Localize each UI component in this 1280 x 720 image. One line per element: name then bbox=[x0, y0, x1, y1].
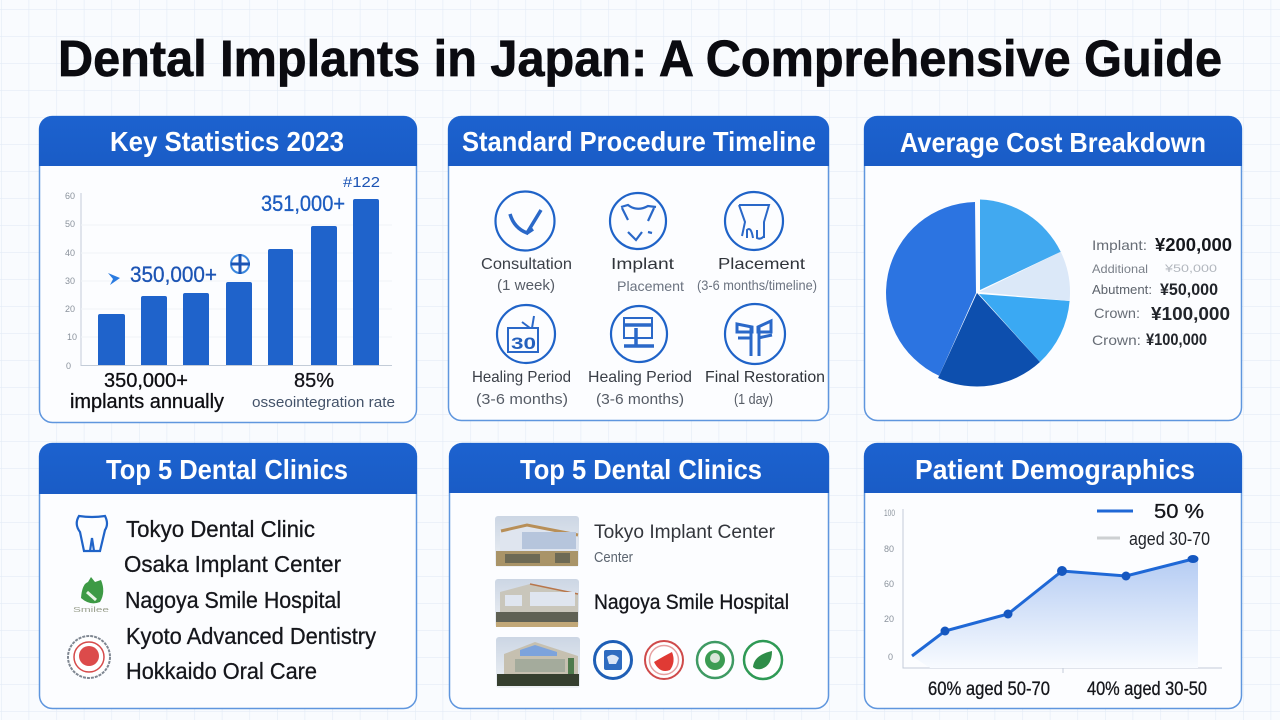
step: healing period: Healing Period bbox=[472, 369, 571, 386]
panel: patient demographics bbox=[864, 443, 1242, 708]
step: healing period two: (3-6 months) bbox=[596, 391, 684, 408]
panel: cost breakdown bbox=[864, 116, 1242, 420]
icon: tooth logo bbox=[77, 516, 107, 551]
step: consultation: Consultation bbox=[481, 256, 572, 273]
clinic names: Tokyo Dental Clinic bbox=[126, 516, 315, 542]
step: healing period two: Healing Period bbox=[588, 369, 692, 386]
legend: ¥50,000 bbox=[1164, 263, 1217, 275]
callout: upper stat on chart: #122 bbox=[343, 174, 380, 191]
caption: ages 50 to 70: 60% aged 50-70 bbox=[928, 679, 1050, 700]
icon: consultation check bbox=[496, 192, 554, 250]
photo: clinic building one bbox=[495, 516, 579, 567]
legend: ¥100,000 bbox=[1146, 330, 1207, 349]
heading: top clinics photos bbox=[449, 443, 829, 493]
clinic names: Nagoya Smile Hospital bbox=[125, 587, 341, 613]
stat: implants annually bbox=[70, 370, 224, 413]
callout: lower stat on chart: 350,000+ bbox=[130, 262, 217, 287]
line chart: 60 bbox=[884, 579, 894, 589]
icon: monitor bbox=[611, 306, 667, 362]
badge: green two bbox=[744, 641, 782, 679]
icon: red seal logo bbox=[68, 636, 110, 678]
chart legend bbox=[1097, 501, 1210, 549]
icon: calendar: 30 bbox=[511, 334, 536, 353]
legend: Implant: bbox=[1092, 237, 1147, 253]
heading: key statistics: Key Statistics 2023 bbox=[110, 126, 344, 157]
bar chart: 30 bbox=[65, 276, 75, 286]
clinic names: Hokkaido Oral Care bbox=[126, 658, 317, 684]
panel: key statistics bbox=[39, 116, 417, 422]
pie chart bbox=[886, 200, 1070, 386]
callout: lower stat on chart bbox=[108, 254, 250, 287]
legend: Crown: bbox=[1092, 332, 1141, 348]
photo: clinic building two bbox=[495, 579, 579, 627]
chart legend: aged 30-70 bbox=[1129, 529, 1210, 549]
heading: procedure timeline bbox=[448, 116, 829, 166]
line chart: 80 bbox=[884, 544, 894, 554]
caption: ages 30 to 50: 40% aged 30-50 bbox=[1087, 679, 1207, 700]
line chart: 100 bbox=[884, 508, 895, 518]
legend: Abutment: bbox=[1092, 282, 1152, 297]
heading: top clinics list: Top 5 Dental Clinics bbox=[106, 454, 348, 485]
stat: success rate: osseointegration rate bbox=[252, 394, 395, 411]
line chart: 0 bbox=[888, 652, 893, 662]
chart legend: 50 % bbox=[1154, 501, 1204, 523]
heading: patient demographics bbox=[864, 443, 1242, 493]
step: final restoration: (1 day) bbox=[734, 391, 773, 408]
badge: green one bbox=[697, 642, 733, 678]
legend: ¥50,000 bbox=[1160, 280, 1218, 299]
bar chart: 60 bbox=[65, 191, 75, 201]
step: final restoration bbox=[705, 304, 825, 408]
stat: success rate bbox=[252, 370, 395, 411]
bar chart: 50 bbox=[65, 219, 75, 229]
icon: leaf logo bbox=[73, 577, 109, 614]
clinic names: Kyoto Advanced Dentistry bbox=[126, 623, 376, 649]
step: placement bbox=[697, 192, 817, 293]
step: consultation: (1 week) bbox=[497, 277, 555, 294]
heading: cost breakdown bbox=[864, 116, 1242, 166]
line chart bbox=[884, 508, 1222, 673]
callout: upper stat on chart bbox=[261, 174, 380, 216]
legend: ¥200,000 bbox=[1155, 235, 1232, 255]
icon: tooth bbox=[725, 192, 783, 250]
clinic names: Osaka Implant Center bbox=[124, 551, 341, 577]
heading: procedure timeline: Standard Procedure Timeline bbox=[462, 126, 816, 157]
heading: top clinics list bbox=[39, 443, 417, 494]
step: implant placement bbox=[610, 193, 684, 294]
step: healing period: (3-6 months) bbox=[476, 391, 568, 408]
heading: top clinics photos: Top 5 Dental Clinics bbox=[520, 454, 762, 485]
step: implant placement: Placement bbox=[617, 278, 684, 294]
photo: clinic building three bbox=[496, 637, 580, 688]
panel: procedure timeline bbox=[448, 116, 829, 420]
icon: implant bbox=[610, 193, 666, 249]
stat: implants annually: implants annually bbox=[70, 391, 224, 413]
title: Dental Implants in Japan: A Comprehensive Guide bbox=[58, 30, 1222, 87]
stat: implants annually: 350,000+ bbox=[104, 370, 188, 392]
stat: success rate: 85% bbox=[294, 370, 334, 392]
step: final restoration: Final Restoration bbox=[705, 369, 825, 386]
step: implant placement: Implant bbox=[611, 256, 675, 273]
bar chart: 10 bbox=[67, 332, 77, 342]
heading: patient demographics: Patient Demographics bbox=[915, 454, 1195, 485]
icon: crown bbox=[725, 304, 785, 364]
badge: blue bbox=[594, 642, 632, 678]
icon: leaf logo: Smilee bbox=[73, 607, 109, 614]
legend: Crown: bbox=[1094, 305, 1140, 321]
bar chart: 0 bbox=[66, 361, 71, 371]
legend: Additional bbox=[1092, 262, 1148, 276]
panel: top clinics list bbox=[39, 443, 417, 708]
legend: ¥100,000 bbox=[1151, 304, 1230, 324]
heading: cost breakdown: Average Cost Breakdown bbox=[900, 127, 1206, 158]
clinic name: second: Nagoya Smile Hospital bbox=[594, 591, 789, 614]
clinic name: first: Tokyo Implant Center bbox=[594, 522, 776, 543]
clinic name: first: Center bbox=[594, 549, 633, 566]
bar chart: 20 bbox=[65, 304, 75, 314]
bar chart: 40 bbox=[65, 248, 75, 258]
bar chart bbox=[65, 191, 392, 371]
heading: key statistics bbox=[39, 116, 417, 166]
legend bbox=[1092, 235, 1232, 349]
step: placement: (3-6 months/timeline) bbox=[697, 277, 817, 293]
step: placement: Placement bbox=[718, 256, 806, 273]
step: healing period bbox=[472, 305, 571, 408]
callout: upper stat on chart: 351,000+ bbox=[261, 191, 345, 216]
clinic names bbox=[124, 516, 376, 684]
step: consultation bbox=[481, 192, 572, 294]
panel: top clinics photos bbox=[449, 443, 829, 708]
step: healing period two bbox=[588, 306, 692, 408]
line chart: 20 bbox=[884, 614, 894, 624]
clinic name: first bbox=[594, 522, 776, 566]
badge: red bbox=[645, 641, 683, 679]
